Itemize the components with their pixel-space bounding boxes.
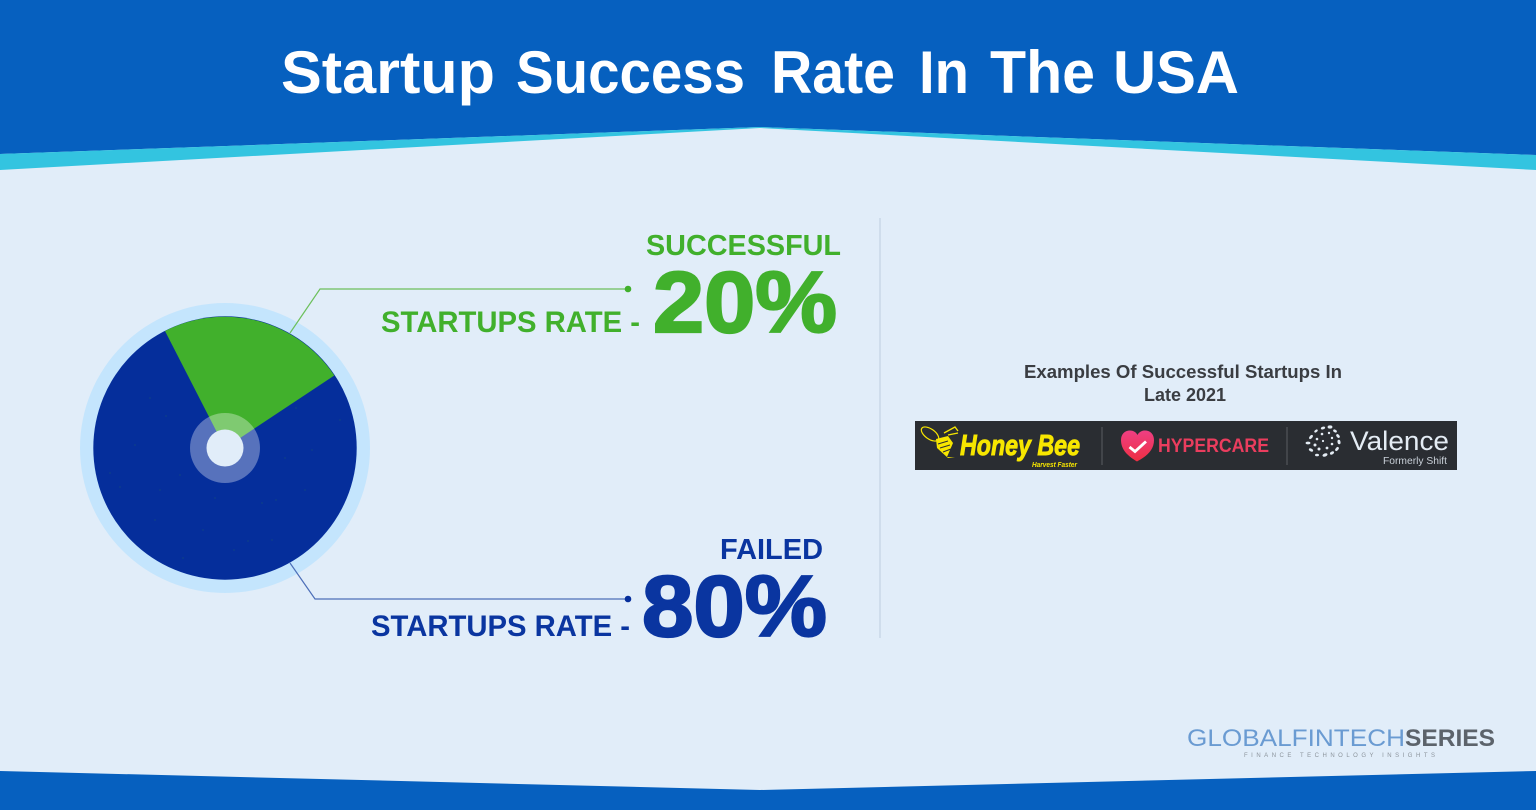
examples heading: Late 2021	[1144, 385, 1226, 405]
callout: failed startups: 80%	[642, 559, 827, 655]
pie chart: startup outcomes	[80, 303, 370, 593]
startup logos strip: Harvest Faster	[1032, 462, 1078, 469]
title: USA	[1113, 39, 1239, 106]
examples heading	[1024, 362, 1342, 405]
icon: bee	[919, 424, 958, 458]
footer banner	[0, 771, 1536, 810]
callout: successful startups: 20%	[653, 255, 837, 351]
brand logo: Global Fintech Series: FINANCE TECHNOLOGY INSIGHTS	[1244, 753, 1435, 759]
brand logo: Global Fintech Series: SERIES	[1405, 725, 1495, 752]
callout: failed startups: FAILED	[720, 534, 823, 566]
header banner	[0, 0, 1536, 170]
brand logo: Global Fintech Series	[1187, 725, 1495, 759]
title: In	[919, 39, 969, 106]
logo: Valence: Valence	[1350, 426, 1449, 456]
title: Success	[516, 39, 745, 106]
title: The	[990, 39, 1095, 106]
title: Startup	[281, 39, 495, 106]
brand logo: Global Fintech Series: GLOBALFINTECH	[1187, 725, 1405, 752]
callout: successful startups	[290, 230, 841, 351]
callout: failed startups	[290, 534, 827, 655]
icon: heart	[1121, 430, 1154, 462]
title	[281, 39, 1239, 106]
icon: valence dots	[1306, 425, 1341, 457]
logo: Honey Bee: Honey Bee	[960, 430, 1080, 462]
pie slice: successful 20%	[165, 317, 334, 448]
logo: Hypercare: HYPERCARE	[1158, 436, 1269, 457]
title: Rate	[771, 39, 895, 106]
startup logos strip: Formerly Shift	[1383, 456, 1447, 467]
callout: successful startups: SUCCESSFUL	[646, 230, 841, 262]
examples heading: Examples Of Successful Startups In	[1024, 362, 1342, 382]
callout: failed startups: STARTUPS RATE -	[371, 610, 630, 643]
startup logos strip	[915, 421, 1457, 470]
callout: successful startups: STARTUPS RATE -	[381, 306, 640, 339]
